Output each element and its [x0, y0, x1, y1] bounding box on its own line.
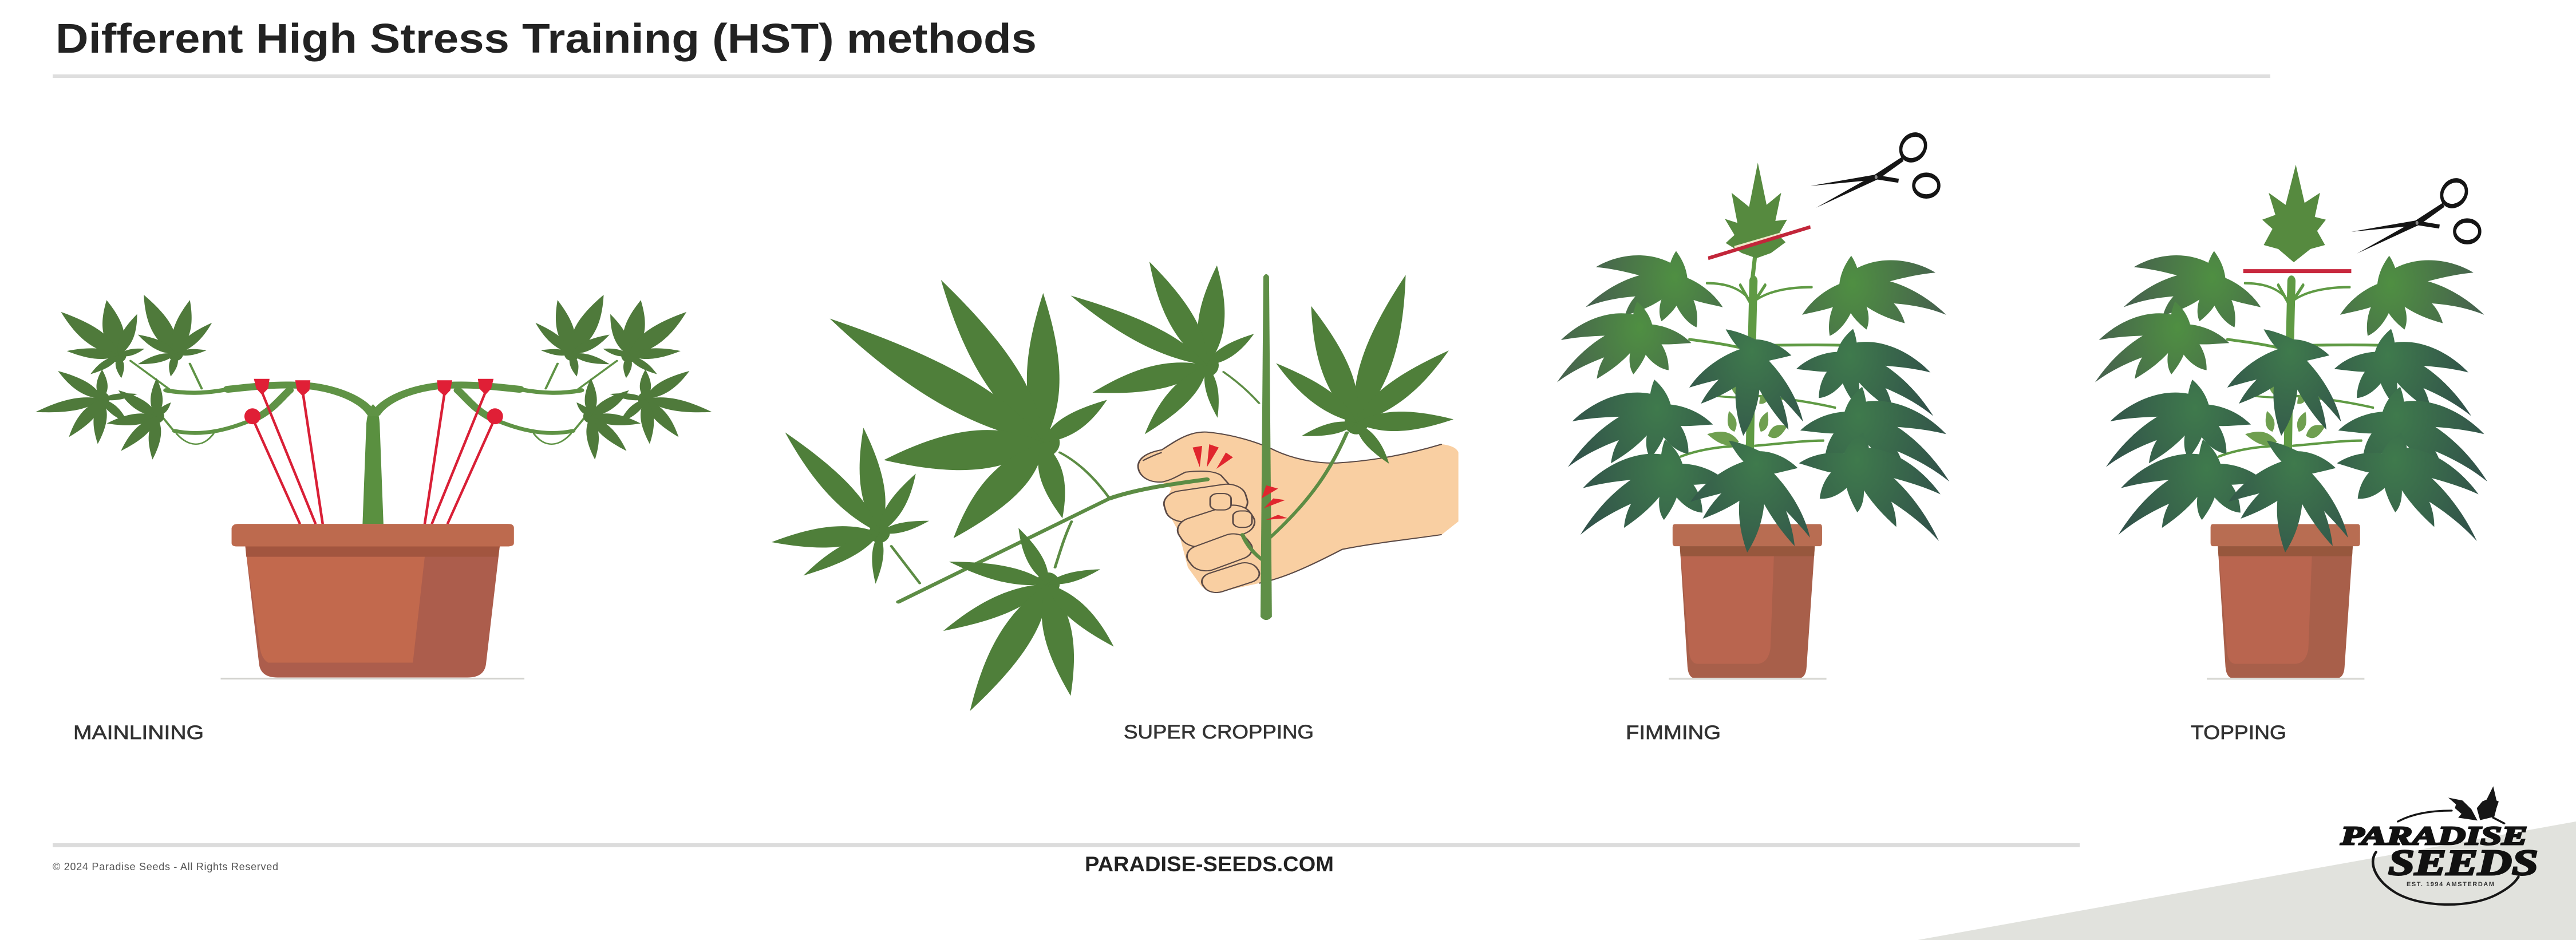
cut line	[2243, 268, 2351, 274]
illustration: hand pinching a branch	[770, 258, 1459, 716]
panel: super cropping	[770, 258, 1459, 743]
label: mainlining: MAINLINING	[73, 722, 204, 744]
illustration: fimming plant with scissors	[1548, 131, 1961, 679]
panel: mainlining	[34, 292, 714, 744]
stems	[891, 372, 1347, 602]
label: super cropping: SUPER CROPPING	[1124, 721, 1314, 743]
upper stem	[1752, 257, 1755, 283]
illustration: topping plant with scissors	[2087, 165, 2499, 679]
potted plant	[1548, 251, 1961, 679]
top bud	[1725, 163, 1787, 258]
vertical main stem	[1261, 274, 1272, 620]
panel: topping	[2087, 165, 2499, 744]
corner wedge	[1918, 821, 2576, 940]
leaves	[770, 258, 1459, 716]
logo emblem	[2373, 786, 2518, 905]
panel: fimming	[1548, 131, 1961, 744]
cut line	[1708, 227, 1811, 258]
logo wordmark: PARADISE	[2340, 821, 2527, 850]
scissors	[2351, 177, 2480, 254]
label: fimming: FIMMING	[1626, 722, 1721, 744]
logo tagline: EST. 1994 AMSTERDAM	[2407, 881, 2494, 888]
label: topping: TOPPING	[2191, 722, 2286, 744]
logo wordmark second line: SEEDS	[2388, 842, 2538, 883]
footer copyright: © 2024 Paradise Seeds - All Rights Reserved	[53, 861, 278, 872]
branches, leaves and red tie-downs	[34, 292, 714, 524]
hand	[1138, 432, 1459, 595]
plant pot	[220, 524, 524, 678]
logo: paradise seeds	[2340, 786, 2538, 905]
title: Different High Stress Training (HST) methods	[56, 16, 1037, 62]
illustration: mainlined plant in pot	[34, 292, 714, 678]
removed top bud	[2262, 165, 2326, 262]
main stem	[362, 404, 384, 524]
potted plant	[2087, 251, 2499, 679]
red pressure marks	[1192, 444, 1287, 520]
footer website: PARADISE-SEEDS.COM	[1085, 852, 1334, 876]
scissors	[1811, 131, 1939, 208]
